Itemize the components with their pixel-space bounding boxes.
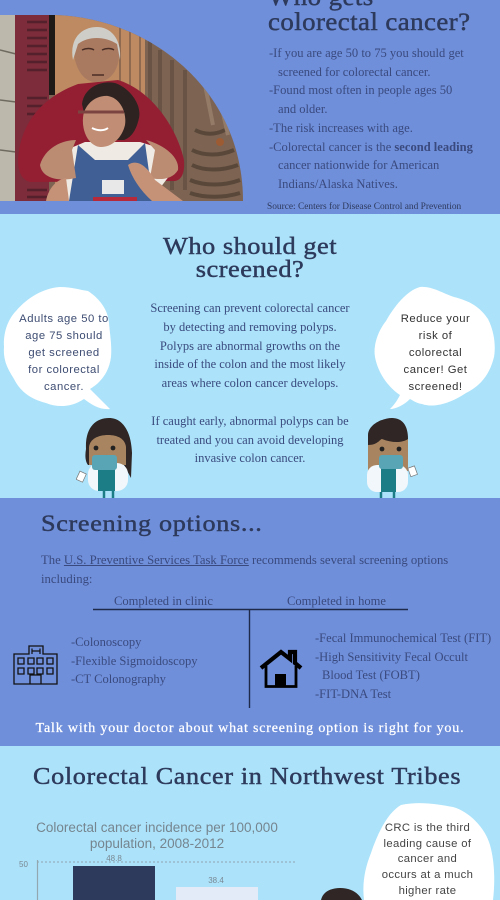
speech bubble: left: cancer. (44, 381, 84, 393)
table lines (93, 608, 408, 708)
column heading: home: Completed in home (287, 594, 386, 608)
panel: screening options (0, 498, 500, 746)
chart title: population, 2008-2012 (90, 836, 224, 850)
photo: older couple (0, 15, 243, 201)
speech bubble: left: age 75 should (25, 330, 103, 342)
heading: who should get screened: Who should get (163, 234, 337, 260)
speech bubble: right: risk of (419, 330, 452, 342)
text block: home options (315, 631, 491, 701)
heading: screening options: Screening options... (41, 511, 263, 537)
text block: risk facts (269, 46, 473, 191)
text block: risk facts: cancer nationwide for American (278, 158, 439, 172)
speech bubble: CRC (363, 803, 494, 900)
text block: risk facts: -The risk increases with age. (269, 121, 413, 135)
speech bubble: left (4, 287, 112, 410)
text block: home options: -High Sensitivity Fecal Occult (315, 650, 468, 664)
text block: home options: -Fecal Immunochemical Test (FIT) (315, 631, 491, 645)
panel: who gets colorectal cancer (0, 0, 500, 214)
text block: task force recommendation: including: (41, 572, 92, 586)
speech bubble: left: Adults age 50 to (19, 313, 109, 325)
text block: home options: -FIT-DNA Test (315, 687, 391, 701)
speech bubble: left: get screened (28, 347, 100, 359)
illustration: male doctor with mask (367, 418, 418, 498)
illustration: female doctor with mask (76, 418, 132, 498)
speech bubble: CRC: higher rate (399, 885, 456, 897)
text block: risk facts: Indians/Alaska Natives. (278, 177, 398, 191)
speech bubble: right: Reduce your (401, 313, 470, 325)
speech bubble: left: for colorectal (28, 364, 100, 376)
speech bubble: right: cancer! Get (404, 364, 467, 376)
text block: task force recommendation: The U.S. Preventive Services Task Force recommends several screening options (41, 553, 448, 567)
heading: who should get screened (162, 234, 337, 282)
text block: risk facts: -If you are age 50 to 75 you should get (269, 46, 464, 60)
icon: house (260, 649, 302, 688)
panel: who should get screened (0, 215, 500, 498)
text block: screening explanation (150, 301, 350, 465)
illustration: doctor head (321, 888, 362, 900)
bar chart: incidence: 48.8 (106, 854, 122, 863)
heading: northwest tribes: Colorectal Cancer in Northwest Tribes (33, 764, 461, 790)
text block: screening explanation: areas where colon cancer develops. (162, 376, 338, 390)
text block: screening explanation: treated and you can avoid developing (156, 433, 344, 447)
heading: who gets colorectal cancer: colorectal cancer? (268, 8, 470, 36)
speech bubble: CRC: cancer and (398, 853, 457, 865)
panel: colorectal cancer in northwest tribes (0, 746, 500, 900)
callout: talk with your doctor: Talk with your doctor about what screening option is right for you. (36, 721, 464, 736)
speech bubble: right: colorectal (409, 347, 462, 359)
heading: who should get screened: screened? (196, 256, 304, 282)
text block: screening explanation: invasive colon cancer. (195, 451, 305, 465)
text block: clinic options: -CT Colonography (71, 672, 166, 686)
speech bubble: right: screened! (408, 381, 463, 393)
text block: screening explanation: inside of the colon and the most likely (154, 357, 346, 371)
text block: task force recommendation (41, 553, 448, 586)
speech bubble: CRC: occurs at a much (382, 869, 473, 881)
text block: screening explanation: If caught early, abnormal polyps can be (151, 414, 349, 428)
text block: screening explanation: Screening can prevent colorectal cancer (150, 301, 350, 315)
text block: clinic options: -Colonoscopy (71, 635, 141, 649)
bar chart: incidence: 38.4 (208, 876, 224, 885)
text block: risk facts: screened for colorectal cancer. (278, 65, 431, 79)
text block: clinic options: -Flexible Sigmoidoscopy (71, 654, 198, 668)
bar chart: incidence (19, 854, 295, 900)
chart title (36, 820, 278, 851)
column heading: clinic: Completed in clinic (114, 594, 213, 608)
text block: risk facts: -Found most often in people ages 50 (269, 83, 452, 97)
speech bubble: CRC: CRC is the third (385, 822, 470, 834)
icon: hospital (13, 645, 58, 685)
text block: clinic options (71, 635, 198, 686)
text block: screening explanation: by detecting and removing polyps. (163, 320, 337, 334)
bar chart: incidence: 50 (19, 860, 28, 869)
source note: Source: Centers for Disease Control and Prevention (267, 202, 461, 212)
speech bubble: CRC: leading cause of (384, 838, 471, 850)
text block: risk facts: and older. (278, 102, 327, 116)
text block: home options: Blood Test (FOBT) (322, 668, 420, 682)
chart title: Colorectal cancer incidence per 100,000 (36, 820, 278, 835)
speech bubble: right (374, 286, 495, 409)
text block: risk facts: -Colorectal cancer is the second leading (269, 140, 473, 154)
text block: screening explanation: Polyps are abnormal growths on the (160, 339, 340, 353)
